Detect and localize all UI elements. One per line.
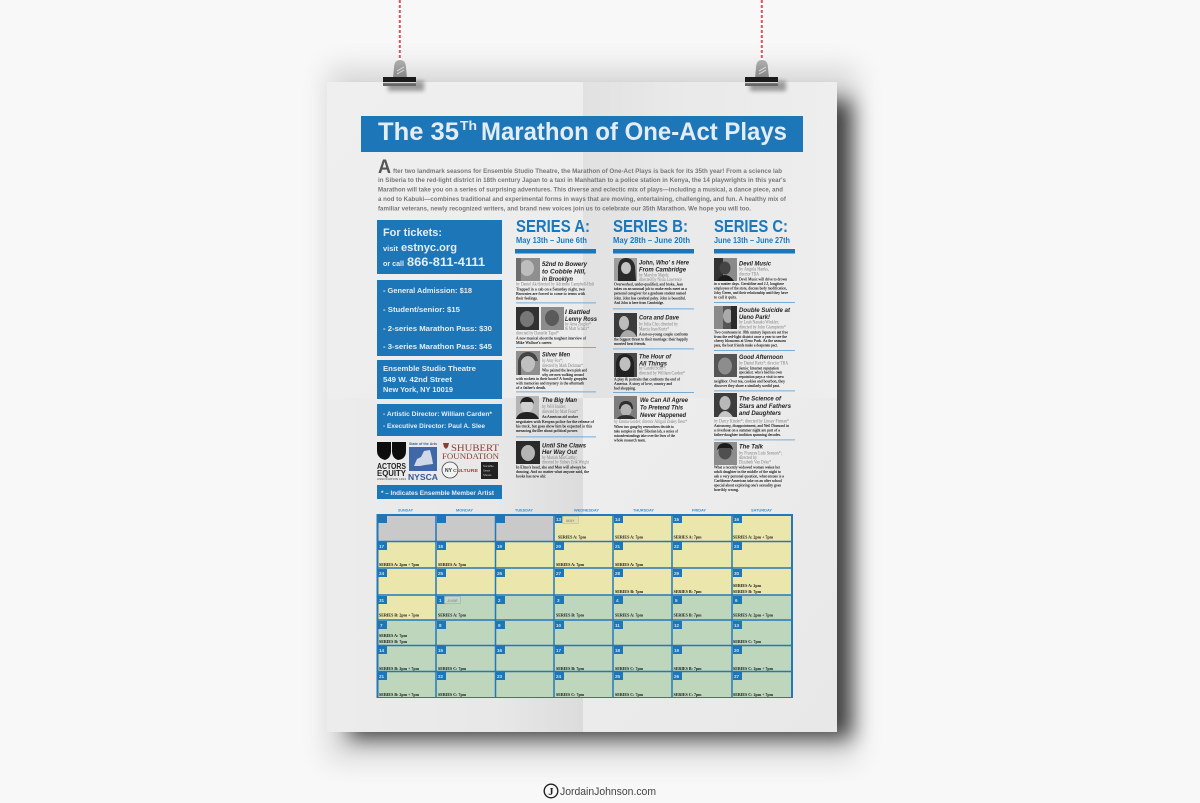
logo: Shubert Foundation: SHUBERT [451, 444, 499, 454]
performances: SERIES A: 2pm + 7pm [733, 612, 773, 618]
intro paragraph: a nod to Kabuki—combines traditional and experimental forms in ways that are moving, entertaining, challenging, and fun. A healthy mix of [378, 196, 787, 203]
play: Double Suicide at Ueno Park: Double Suicide at [739, 307, 791, 314]
play: The Talk [714, 442, 784, 492]
date numbers [379, 517, 740, 679]
performances: SERIES A: 7pm [556, 562, 584, 567]
play: We Can All Agree To Pretend: misunderstandings take over the lives of the [614, 433, 675, 438]
play: Cora and Dave: married best friends. [614, 341, 646, 346]
weekday headers: SATURDAY [751, 508, 772, 512]
title banner: Th [460, 118, 477, 133]
play: John, Who's Here From Cambridge: directed by Nisia Lawrence [639, 278, 682, 283]
play: The Hour of All Things: bad shopping. [614, 386, 636, 390]
date tabs [378, 515, 742, 680]
performances: SERIES C: 7pm [615, 692, 643, 697]
logo: NYCulture: CULTURE [453, 468, 479, 474]
date numbers: 19 [497, 544, 503, 549]
logo: NYSCA [408, 442, 438, 482]
date numbers: 30 [734, 571, 740, 576]
panel: prices [377, 280, 502, 356]
play: The Talk: directed by [739, 456, 757, 461]
date numbers: 24 [379, 571, 385, 576]
play: John, Who's Here From Cambridge: by Marylyn Majeh; [639, 274, 669, 278]
play: The Talk: adult daughter in the middle of the night to [714, 469, 782, 474]
logo: NYSCA: NYSCA [408, 473, 438, 482]
play: We Can All Agree To Pretend [614, 396, 688, 442]
date numbers: 2 [498, 598, 501, 603]
play: We Can All Agree To Pretend: take samples in their Siberian lab, a series of [614, 428, 678, 434]
date numbers: 21 [615, 544, 621, 549]
weekday headers: MONDAY [456, 508, 473, 512]
date numbers: 14 [379, 648, 385, 653]
play: Devil Music: Devil Music [739, 260, 771, 268]
play: Until She Claws Her Way Out: books has now ahi: [516, 474, 546, 478]
panel: address: 549 W. 42nd Street [383, 375, 453, 384]
play: The Hour of All Things: directed by William Carden* [639, 372, 685, 376]
calendar [377, 508, 792, 698]
play: Silver Men: why are men walking around [542, 372, 585, 377]
date numbers: 18 [438, 544, 444, 549]
play: Devil Music: director TBA [739, 272, 759, 278]
panel: tickets: For tickets: [383, 227, 442, 239]
play: Silver Men: directed by Mark Dickman* [542, 364, 583, 369]
play: The Talk: special about exploring one's sexuality goes [714, 482, 781, 488]
panel: directors [377, 404, 502, 436]
performances: SERIES A: 7pm [674, 534, 702, 540]
logo: Actors Equity: ASSOCIATION 1913 [377, 477, 406, 481]
play: We Can All Agree To Pretend: whole research team. [614, 438, 646, 442]
play: The Talk: by Frances Lois Senson*; [739, 452, 782, 456]
play: 52nd to Bowery: by Daniel Ak/directed by Adrienne Campbell-Holt [516, 282, 595, 288]
performances: SERIES A: 7pm [379, 633, 407, 638]
play: I Battled Lenny Ross [516, 307, 597, 345]
panel: prices: - General Admission: $18 [383, 288, 472, 295]
poster content [361, 116, 803, 698]
date numbers: 13 [556, 517, 562, 522]
legend note: * – Indicates Ensemble Member Artist [381, 490, 495, 497]
panel: prices: - 2-series Marathon Pass: $30 [383, 326, 492, 333]
play: John, Who's Here From Cambridge: John, Who' s Here [639, 260, 689, 266]
date numbers: 20 [734, 648, 740, 653]
performances: SERIES A: 7pm [615, 534, 643, 540]
play: The Science of Stars and Fathers and Daughters: father-daughter tradition spanning decades. [714, 432, 781, 437]
play: Cora and Dave: Marcia Jean Kurtz* [639, 328, 669, 332]
play: Double Suicide at Ueno Park: Ueno Park! [739, 314, 771, 321]
play: Good Afternoon: specialist. who's had his own [739, 370, 783, 374]
performances [379, 534, 773, 697]
performances: SERIES C: 7pm [733, 639, 761, 644]
logo: Shubert Foundation [442, 443, 499, 461]
date numbers: 11 [615, 623, 620, 628]
play: I Battled Lenny Ross: Lenny Ross [565, 316, 597, 323]
legend note [377, 485, 502, 499]
play: John, Who's Here From Cambridge: And John is here from Cambridge. [614, 300, 664, 305]
play: The Big Man: menacing thriller about political power. [516, 428, 578, 433]
panel: prices: - 3-series Marathon Pass: $45 [383, 344, 492, 351]
play: The Talk: ask a very personal question, what ensues is a [714, 474, 784, 480]
date numbers: 8 [439, 623, 442, 628]
play: Cora and Dave: the biggest threat to their marriage: their happily [614, 336, 689, 342]
weekday headers [398, 508, 772, 512]
date numbers: 23 [734, 544, 740, 549]
play: Until She Claws Her Way Out: In Elmo's head, she and Man will always be [516, 464, 586, 470]
panel: address [377, 360, 502, 399]
panel: Series B [613, 216, 694, 442]
date numbers: 19 [674, 648, 680, 653]
play: The Science of Stars and Fathers and Daughters: The Science of [739, 396, 782, 402]
play: Until She Claws Her Way Out: dancing. And no matter what anyone said, the [516, 469, 589, 475]
play: The Big Man: directed by Matt Feast* [542, 410, 578, 415]
intro paragraph [378, 156, 787, 212]
play: John, Who's Here From Cambridge: John. John has cerebral palsy. John is beautiful. [614, 296, 686, 300]
performances: SERIES B: 2pm + 7pm [379, 612, 419, 618]
heading: SERIES B: [613, 216, 688, 236]
play: The Science of Stars and Fathers and Daughters [714, 393, 791, 437]
play: John, Who's Here From Cambridge: takes on an unusual job to make ends meet as a [614, 286, 687, 291]
play: Until She Claws Her Way Out: Her Way Out [542, 449, 578, 456]
play: The Hour of All Things [614, 353, 685, 390]
date numbers: 28 [615, 571, 621, 576]
play: Good Afternoon [714, 354, 788, 388]
title banner [361, 116, 803, 152]
play: The Science of Stars and Fathers and Daughters: and Daughters [739, 410, 781, 417]
panel: prices: - Student/senior: $15 [383, 307, 460, 314]
play: John, Who's Here From Cambridge: From Cambridge [639, 266, 686, 274]
play: Good Afternoon: by Daniel Reitz*; director TBA [739, 362, 788, 366]
play: The Hour of All Things: by Candid Scott*; [639, 366, 666, 372]
performances: SERIES B: 7pm [674, 612, 702, 618]
performances: SERIES B: 7pm [615, 589, 643, 594]
play: I Battled Lenny Ross: I Battled [565, 309, 591, 316]
play: 52nd to Bowery: Brownies are forced to come to terms with [516, 291, 586, 296]
play: Double Suicide at Ueno Park: cherry blossoms at Ueno Park. As the seasons [714, 338, 786, 343]
play: 52nd to Bowery: 52nd to Bowery [542, 261, 588, 268]
footer credit: J [548, 787, 554, 798]
month tag: May [562, 516, 578, 524]
date numbers: 5 [675, 598, 678, 603]
performances: SERIES C: 7pm [438, 692, 466, 697]
logo: Actors Equity [377, 442, 407, 481]
heading: SERIES A: [516, 216, 590, 236]
play: Silver Men: of a father's death. [516, 385, 546, 390]
play: I Battled Lenny Ross: & Matt Schatz* [565, 327, 589, 332]
date numbers: 7 [380, 623, 383, 628]
performances: SERIES A: 2pm + 7pm [379, 562, 419, 567]
play: The Big Man: his truck, but goes show him be expected in this [516, 424, 592, 430]
play: Devil Music [714, 258, 788, 300]
logo: dark box [481, 462, 498, 479]
month tag: June [444, 596, 460, 604]
play: John, Who's Here From Cambridge [614, 258, 689, 305]
panel: Series A [515, 216, 597, 478]
play: Good Afternoon: discover they share a similarly sordid past. [714, 383, 780, 388]
play: The Big Man: The Big Man [542, 397, 577, 404]
play: The Science of Stars and Fathers and Daughters: Astronomy, disappointment, and Neil Diamond in [714, 423, 790, 429]
play: Silver Men: with memories and mystery in the aftermath [516, 380, 585, 386]
play: The Talk: Elizabeth Van Dyke* [739, 460, 771, 466]
play: Until She Claws Her Way Out: directed by Sidney Erik Wright [542, 460, 590, 466]
play: Devil Music: Joby Green, and their relationship until they have [714, 290, 788, 296]
performances: SERIES C: 7pm [556, 692, 584, 697]
date numbers: 26 [497, 571, 503, 576]
panel: tickets: or call [383, 261, 404, 268]
performances: SERIES A: 7pm [615, 562, 643, 567]
play: John, Who's Here From Cambridge: personal caregiver for a graduate student named [614, 290, 687, 296]
play: The Science of Stars and Fathers and Daughters: a riverboat on a summer night are part of a [714, 428, 780, 432]
play: Silver Men: by Amy Fox*; [542, 359, 563, 364]
performances: SERIES B: 7pm [379, 639, 407, 644]
play: Devil Music: employees of the store, discuss body modification, [714, 286, 787, 292]
title banner: Marathon of One-Act Plays [481, 118, 787, 146]
date numbers: 31 [379, 598, 385, 603]
play: Silver Men [516, 351, 588, 390]
month tag: June: JUNE [447, 598, 458, 603]
date numbers: 16 [497, 648, 503, 653]
play: Double Suicide at Ueno Park: directed by John Giampietro* [739, 326, 786, 330]
date numbers: 9 [498, 623, 501, 628]
title banner: The 35 [378, 118, 459, 146]
performances: SERIES A: 2pm [733, 583, 761, 588]
date numbers: 6 [735, 598, 738, 603]
panel: directors: - Executive Director: Paul A. Slee [383, 423, 486, 430]
play: 52nd to Bowery: their feelings. [516, 296, 538, 300]
performances: SERIES C: 7pm [615, 666, 643, 671]
panel: tickets [377, 220, 502, 274]
date numbers: 13 [734, 623, 740, 628]
play: The Hour of All Things: America. A story of love, country and [614, 381, 673, 387]
panel: address: Ensemble Studio Theatre [383, 364, 476, 373]
month tag: May: MAY [566, 518, 575, 523]
panel: tickets: 866-811-4111 [407, 255, 485, 269]
date numbers: 24 [556, 674, 562, 679]
panel: directors: - Artistic Director: William Carden* [383, 411, 493, 418]
performances: SERIES B: 7pm [556, 612, 584, 618]
play: Double Suicide at Ueno Park: Two courtesans in 18th century Japan are set free [714, 330, 788, 334]
date numbers: 29 [674, 571, 680, 576]
play: The Hour of All Things: The Hour of [639, 354, 672, 360]
date numbers: 25 [438, 571, 444, 576]
play: The Talk: Caribbean-American take on an after school [714, 478, 783, 483]
performances: SERIES B: 7pm [674, 589, 702, 594]
date numbers: 17 [556, 648, 562, 653]
weekday headers: SUNDAY [398, 508, 413, 512]
date numbers: 16 [734, 517, 740, 522]
performances: SERIES C: 2pm + 7pm [733, 666, 773, 671]
logo: NYCulture: NY [445, 468, 453, 474]
date numbers: 20 [556, 544, 562, 549]
play: Cora and Dave: by Julia Cho; directed by [639, 322, 678, 328]
play: I Battled Lenny Ross: Mike Wallace's career. [516, 340, 552, 345]
play: Silver Men: with rockets in their boots? A family grapples [516, 376, 587, 381]
play: Double Suicide at Ueno Park [714, 306, 791, 348]
performances: SERIES B: 2pm + 7pm [379, 666, 419, 671]
play: We Can All Agree To Pretend: We Can All Agree [640, 397, 688, 404]
play: The Science of Stars and Fathers and Daughters: Stars and Fathers [739, 403, 791, 410]
logo: NYCulture [442, 462, 479, 478]
weekday headers: FRIDAY [692, 508, 706, 512]
performances: SERIES A: 7pm [438, 612, 466, 618]
play: 52nd to Bowery: to Cobble Hill, [542, 268, 586, 276]
play: Devil Music: Devil Music will drive to drown [739, 276, 788, 282]
play: Silver Men: Silver Men [542, 352, 570, 358]
play: Double Suicide at Ueno Park: from the red-light district once a year to see the [714, 334, 787, 339]
play: Until She Claws Her Way Out: Until She Claws [542, 442, 586, 450]
logo: dark box: Seats [483, 468, 491, 472]
date numbers: 18 [615, 648, 621, 653]
play: Devil Music: to call it quits. [714, 294, 737, 300]
drop cap: A [378, 156, 391, 178]
date numbers: 21 [379, 674, 385, 679]
date numbers: 10 [556, 623, 562, 628]
play: Until She Claws Her Way Out [516, 441, 590, 478]
play: We Can All Agree To Pretend: Never Happened [640, 412, 687, 419]
grid lines [377, 515, 792, 698]
dates: June 13th – June 27th [714, 236, 790, 245]
play: We Can All Agree To Pretend: by Emma Goidel; director Abigail Zealey Bess* [614, 420, 687, 425]
intro paragraph: fter two landmark seasons for Ensemble Studio Theatre, the Marathon of One-Act Plays is back for its 35th year! From a science lab [393, 168, 782, 175]
play: Good Afternoon: neighbor. Over tea, cookies and bourbon, they [714, 378, 786, 384]
date numbers: 27 [734, 674, 740, 679]
logo: Actors Equity: EQUITY [377, 469, 407, 478]
play: Good Afternoon: Jamie: Internet reputation [739, 366, 780, 370]
play: We Can All Agree To Pretend: To Pretend This [640, 404, 683, 412]
play: Cora and Dave: A not-so-young couple confronts [639, 332, 688, 336]
play: The Talk: horribly wrong. [714, 487, 739, 492]
play: Good Afternoon: Good Afternoon [739, 354, 783, 361]
date numbers: 22 [674, 544, 680, 549]
date numbers: 12 [674, 623, 680, 628]
play: 52nd to Bowery [516, 258, 595, 300]
cell backgrounds [377, 514, 792, 698]
panel: tickets: visit [383, 246, 399, 253]
date numbers: 26 [674, 674, 680, 679]
play: Devil Music: in a matter days. Geraldine and J.J, longtime [714, 281, 784, 287]
intro paragraph: Marathon will take you on a series of surprising adventures. This diverse and eclectic mix of plays—including a musical, a dance piece, and [378, 186, 783, 194]
play: The Hour of All Things: A play & portraits that confronts the end of [614, 376, 680, 382]
play: 52nd to Bowery: in Brooklyn [542, 276, 573, 283]
play: Silver Men: Who painted the lawn pink and [542, 368, 588, 372]
binder clip: right [745, 0, 786, 91]
date numbers: 17 [379, 544, 385, 549]
performances: SERIES A: 7pm [615, 612, 643, 618]
panel: address: New York, NY 10019 [383, 385, 453, 394]
play: I Battled Lenny Ross: by Arna Ziegler* [565, 322, 591, 328]
play: I Battled Lenny Ross: A new musical about the toughest interview of [516, 336, 586, 340]
logo: dark box: Sociable [483, 464, 494, 468]
logo: Actors Equity: ACTORS [377, 462, 407, 471]
logo: NYSCA: State of the Arts [409, 442, 437, 446]
weekday headers: WEDNESDAY [574, 508, 599, 512]
play: The Big Man: negotiates with Kenyan police for the release of [516, 419, 594, 424]
play: Until She Claws Her Way Out: by Mariah MacCarthy; [542, 456, 577, 461]
weekday headers: TUESDAY [515, 508, 533, 512]
performances: SERIES A: 2pm + 7pm [733, 534, 773, 540]
intro paragraph: familiar veterans, newly recognized writers, and brand new voices join us to celebrate our 35th Marathon. We hope you will too. [378, 206, 751, 212]
play: The Big Man: by Will Snider; [542, 405, 566, 410]
logo: dark box: Shows [483, 473, 492, 477]
date numbers: 22 [438, 674, 444, 679]
binder clip: left [383, 0, 424, 91]
play: Devil Music: by Angela Hanks, [739, 268, 769, 272]
dates: May 28th – June 20th [613, 236, 690, 245]
play: The Science of Stars and Fathers and Daughters: by Darcy Kinder*; directed by Linsay Firman* [714, 420, 789, 424]
date numbers: 25 [615, 674, 621, 679]
panel: tickets: estnyc.org [401, 242, 457, 254]
poster drop shadow [327, 68, 857, 760]
performances: SERIES A: 7pm [558, 534, 586, 540]
date numbers: 14 [615, 517, 621, 522]
performances: SERIES B: 7pm [556, 666, 584, 671]
play: The Talk: The Talk [739, 444, 764, 450]
heading: SERIES C: [714, 216, 788, 236]
intro paragraph: in Siberia to the red-light district in 18th century Japan to a taxi in Manhattan to a police station in Kenya, the 14 playwrights in this year's [378, 177, 786, 184]
weekday headers: THURSDAY [633, 508, 654, 512]
date numbers: 3 [557, 598, 560, 603]
date numbers: 15 [438, 648, 444, 653]
panel: Series C [714, 216, 795, 492]
play: The Big Man [516, 396, 594, 433]
play: 52nd to Bowery: Trapped in a cab on a Saturday night, two [516, 286, 586, 292]
play: Cora and Dave: Cora and Dave [639, 314, 679, 322]
date numbers: 1 [439, 598, 442, 603]
performances: SERIES C: 7pm [438, 666, 466, 671]
date numbers: 27 [556, 571, 562, 576]
play: I Battled Lenny Ross: directed by Danielle Tapol* [516, 332, 559, 336]
play: The Big Man: An American aid worker [542, 414, 578, 419]
dates: May 13th – June 6th [516, 236, 587, 245]
play: The Talk: What a recently widowed woman wakes her [714, 464, 780, 470]
performances: SERIES B: 7pm [674, 666, 702, 671]
play: We Can All Agree To Pretend: When two gang-by researchers decide to [614, 424, 675, 429]
date numbers: 4 [616, 598, 619, 603]
performances: SERIES B: 7pm [733, 589, 761, 594]
poster sheet with fold creases [327, 82, 837, 732]
footer credit: JordainJohnson.com [560, 786, 656, 798]
play: Good Afternoon: reputation pays a visit to new [739, 374, 785, 379]
play: John, Who's Here From Cambridge: Overworked, under-qualified, and broke, Jean [614, 282, 684, 288]
performances: SERIES C: 2pm + 7pm [733, 692, 773, 697]
performances: SERIES C: 7pm [674, 692, 702, 697]
performances: SERIES A: 7pm [438, 562, 466, 567]
play: Double Suicide at Ueno Park: by Leah Nanako Winkler; [739, 320, 779, 326]
play: Double Suicide at Ueno Park: pass, the best friends make a desperate pact. [714, 342, 778, 348]
play: The Hour of All Things: All Things [638, 360, 667, 368]
performances: SERIES B: 2pm + 7pm [379, 692, 419, 697]
logo: Shubert Foundation: FOUNDATION [442, 451, 499, 461]
play: Cora and Dave [614, 313, 689, 346]
logos [377, 442, 499, 482]
date numbers: 23 [497, 674, 503, 679]
date numbers: 15 [674, 517, 680, 522]
